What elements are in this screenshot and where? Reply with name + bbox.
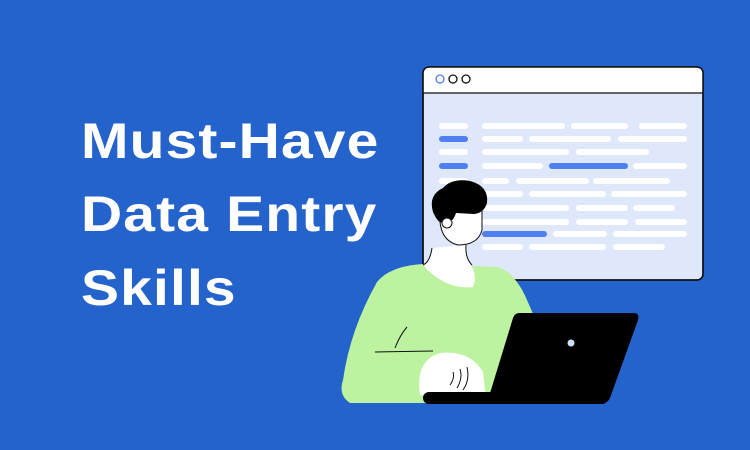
title: Skills [81,260,237,316]
body: green sweater [342,264,540,403]
window dots [436,75,470,83]
neck [423,245,475,287]
laptop [423,313,638,404]
title: Data Entry [81,186,377,242]
data rows [442,126,684,247]
hand [419,353,486,397]
browser window [423,67,703,280]
hair [432,180,487,223]
arm lines [375,327,433,352]
title: Must-Have [81,113,380,169]
face [440,202,482,245]
title [81,113,380,316]
person [342,180,638,404]
ear [442,218,452,228]
